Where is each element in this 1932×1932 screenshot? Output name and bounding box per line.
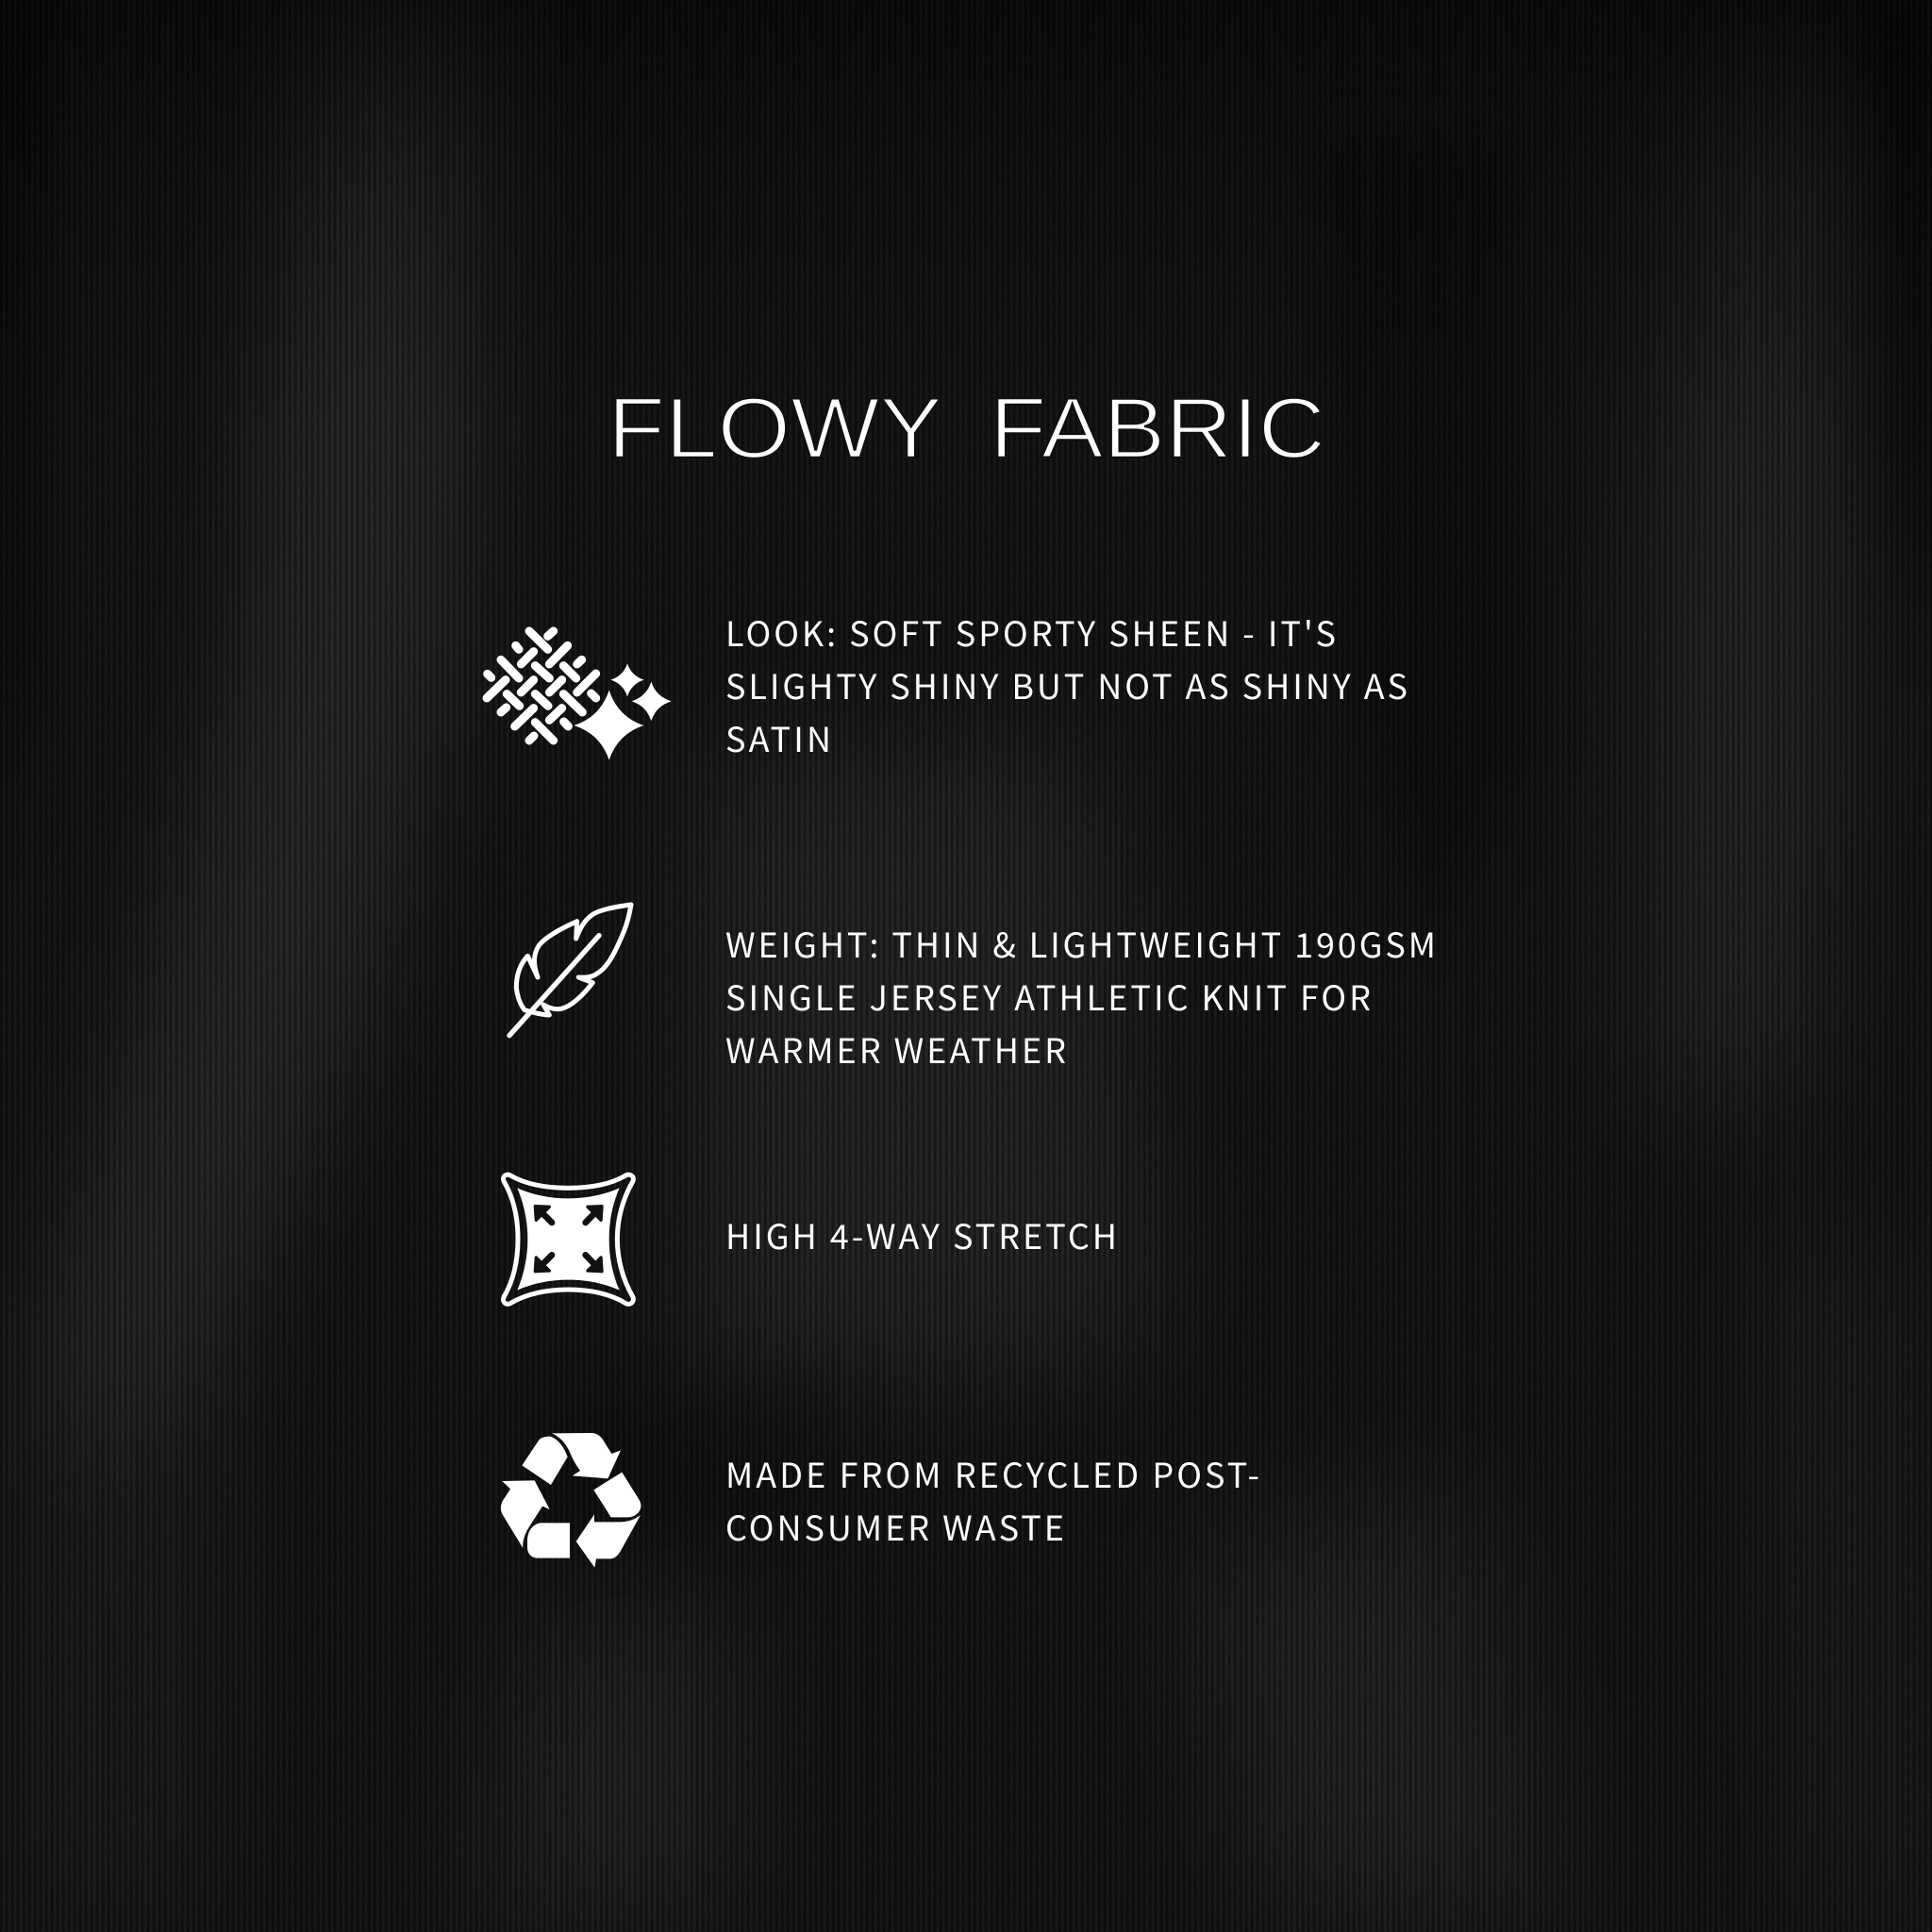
text: weight: SINGLE JERSEY ATHLETIC KNIT FOR xyxy=(725,972,1371,1021)
icon: recycling symbol xyxy=(501,1433,641,1568)
text: weight: WEIGHT: THIN & LIGHTWEIGHT 190GSM xyxy=(725,919,1436,968)
icon: woven fabric with sparkles xyxy=(487,631,672,760)
text: recycled xyxy=(725,1449,1259,1551)
text: weight: WARMER WEATHER xyxy=(725,1024,1066,1074)
icon: feather xyxy=(509,905,631,1036)
title xyxy=(608,381,1325,476)
text: recycled: MADE FROM RECYCLED POST- xyxy=(725,1449,1259,1498)
text: recycled: CONSUMER WASTE xyxy=(725,1502,1064,1551)
text: look: SLIGHTY SHINY BUT NOT AS SHINY AS xyxy=(725,660,1407,709)
title: FLOWY xyxy=(608,381,942,476)
text: stretch: HIGH 4-WAY STRETCH xyxy=(725,1210,1117,1259)
icon: four-way stretch xyxy=(504,1174,633,1304)
title: FABRIC xyxy=(990,381,1325,476)
text: look: LOOK: SOFT SPORTY SHEEN - IT'S xyxy=(725,608,1336,657)
text: look xyxy=(725,608,1407,762)
text: look: SATIN xyxy=(725,713,831,762)
text: weight xyxy=(725,919,1436,1074)
